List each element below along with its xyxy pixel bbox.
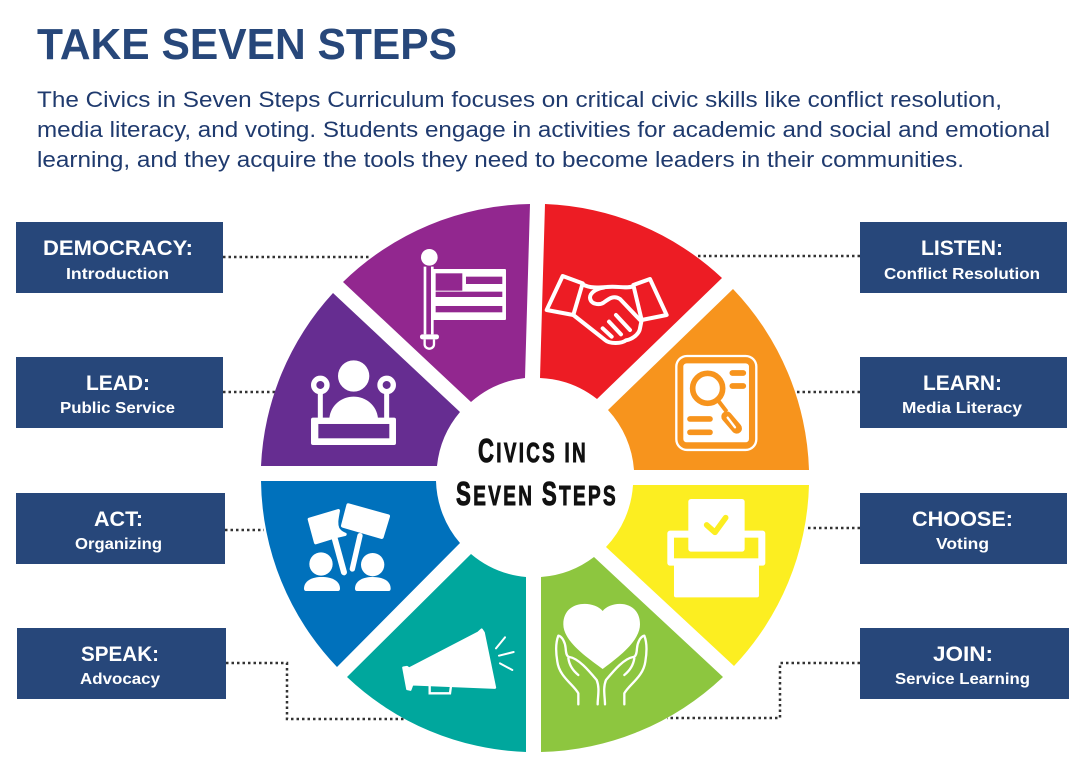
box: speak <box>17 628 226 699</box>
wheel <box>261 204 809 752</box>
intro text <box>37 87 1050 172</box>
box: act: ACT: <box>94 507 143 531</box>
center label: CIVICS IN <box>478 432 588 469</box>
box: choose: CHOOSE: <box>912 507 1013 531</box>
box: speak: SPEAK: <box>81 642 159 666</box>
icon: podium speaker <box>311 360 396 445</box>
intro text: media literacy, and voting. Students engage in activities for academic and social and emotional <box>37 117 1050 142</box>
segment: speak <box>347 554 526 752</box>
box: choose: Voting <box>936 536 989 553</box>
box: join <box>860 628 1069 699</box>
title: TAKE SEVEN STEPS <box>37 20 457 69</box>
segment: join <box>541 557 723 752</box>
center label <box>456 432 618 512</box>
box: listen: Conflict Resolution <box>884 266 1040 283</box>
box: act <box>16 493 225 564</box>
icon: protesters with signs <box>304 505 391 591</box>
box: democracy: Introduction <box>66 266 169 283</box>
box: learn: Media Literacy <box>902 400 1022 417</box>
box: speak: Advocacy <box>80 671 160 688</box>
box: learn: LEARN: <box>923 371 1002 395</box>
intro text: The Civics in Seven Steps Curriculum focuses on critical civic skills like conflict resolution, <box>37 87 1002 112</box>
icon: magnifier on document <box>676 356 756 450</box>
box: act: Organizing <box>75 536 162 553</box>
intro text: learning, and they acquire the tools they need to become leaders in their communities. <box>37 147 964 172</box>
connector lines <box>223 256 860 719</box>
segment: learn <box>608 289 809 470</box>
box: join: JOIN: <box>933 642 993 666</box>
icon: flag <box>420 249 506 349</box>
segment: democracy <box>343 204 530 402</box>
box: democracy: DEMOCRACY: <box>43 236 193 260</box>
box: learn <box>860 357 1067 428</box>
box: lead <box>16 357 223 428</box>
box: democracy <box>16 222 223 293</box>
icon: ballot box <box>667 499 765 597</box>
segment: lead <box>261 293 460 466</box>
box: listen: LISTEN: <box>921 236 1003 260</box>
segment: listen <box>540 204 722 399</box>
segment: choose <box>606 485 809 666</box>
box: choose <box>860 493 1067 564</box>
icon: hands holding heart <box>556 604 647 704</box>
box: lead: Public Service <box>60 400 175 417</box>
box: listen <box>860 222 1067 293</box>
icon: handshake <box>547 276 667 343</box>
segment: act <box>261 481 460 667</box>
box: join: Service Learning <box>895 671 1030 688</box>
center label: SEVEN STEPS <box>456 475 618 512</box>
icon: megaphone <box>403 630 514 693</box>
box: lead: LEAD: <box>86 371 150 395</box>
